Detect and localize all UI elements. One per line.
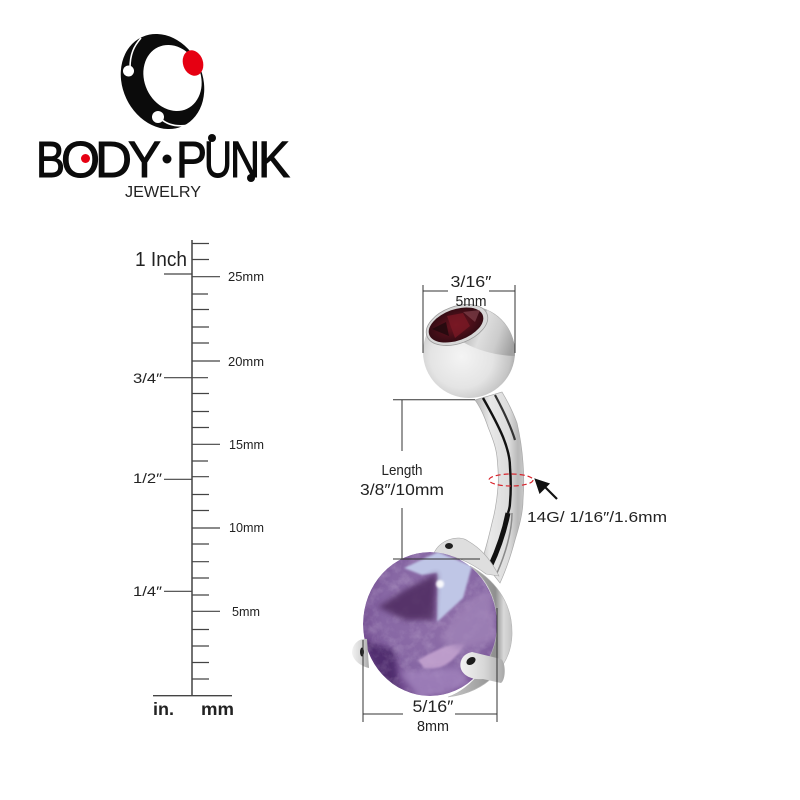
dimension: gauge: 14G/ 1/16″/1.6mm (527, 509, 667, 526)
dimension: gauge (489, 474, 667, 526)
dimension: stone diameter: 8mm (417, 718, 449, 735)
dimension: ball diameter: 5mm (456, 294, 486, 310)
ruler unit labels: mm (201, 699, 234, 719)
logo wordmark: P (176, 131, 207, 188)
top ball (423, 304, 515, 398)
dimension: ball diameter (423, 274, 515, 353)
ruler unit labels (153, 699, 234, 719)
logo wordmark: D (95, 131, 132, 188)
logo wordmark: N (230, 131, 260, 188)
logo wordmark: O (61, 131, 100, 188)
dimension: bar length (360, 400, 480, 559)
bottom setting (352, 538, 512, 700)
logo: Body Punk Jewelry (36, 20, 290, 201)
logo wordmark: B (36, 131, 65, 188)
millimetre labels (228, 269, 264, 619)
inch labels: 3/4″ (133, 371, 162, 386)
logo icon: ring (106, 20, 219, 143)
logo wordmark: U (204, 131, 232, 188)
millimetre labels: 20mm (228, 354, 264, 369)
ruler (133, 240, 264, 719)
inch labels: 1/2″ (133, 471, 162, 486)
logo wordmark (36, 131, 290, 188)
dimension: ball diameter: 3/16″ (450, 274, 492, 291)
red gem (424, 301, 488, 349)
jewelry: curved barbell (352, 297, 524, 700)
millimetre labels: 15mm (229, 437, 264, 452)
dimension: bar length: Length (382, 462, 422, 479)
logo wordmark: Y (128, 131, 161, 188)
ball cup (460, 310, 516, 356)
setting cup (448, 566, 512, 697)
dimension: bar length: 3/8″/10mm (360, 482, 444, 499)
amethyst stone (360, 550, 500, 700)
left prong (352, 639, 369, 668)
dimension: stone diameter: 5/16″ (412, 698, 454, 716)
arrow (536, 480, 557, 499)
logo subtitle: JEWELRY (125, 184, 201, 201)
front prong (460, 652, 505, 683)
bezel (421, 297, 493, 353)
millimetre labels: 25mm (228, 269, 264, 284)
ruler axis and ticks (153, 240, 232, 696)
inch labels (133, 249, 187, 599)
dimension: stone diameter (363, 608, 497, 735)
inch labels: 1/4″ (133, 584, 162, 599)
millimetre labels: 5mm (232, 604, 260, 619)
ruler unit labels: in. (153, 699, 174, 719)
millimetre labels: 10mm (229, 520, 264, 535)
inch labels: 1 Inch (135, 249, 187, 271)
barbell shaft (475, 392, 524, 583)
logo wordmark: K (258, 131, 290, 188)
